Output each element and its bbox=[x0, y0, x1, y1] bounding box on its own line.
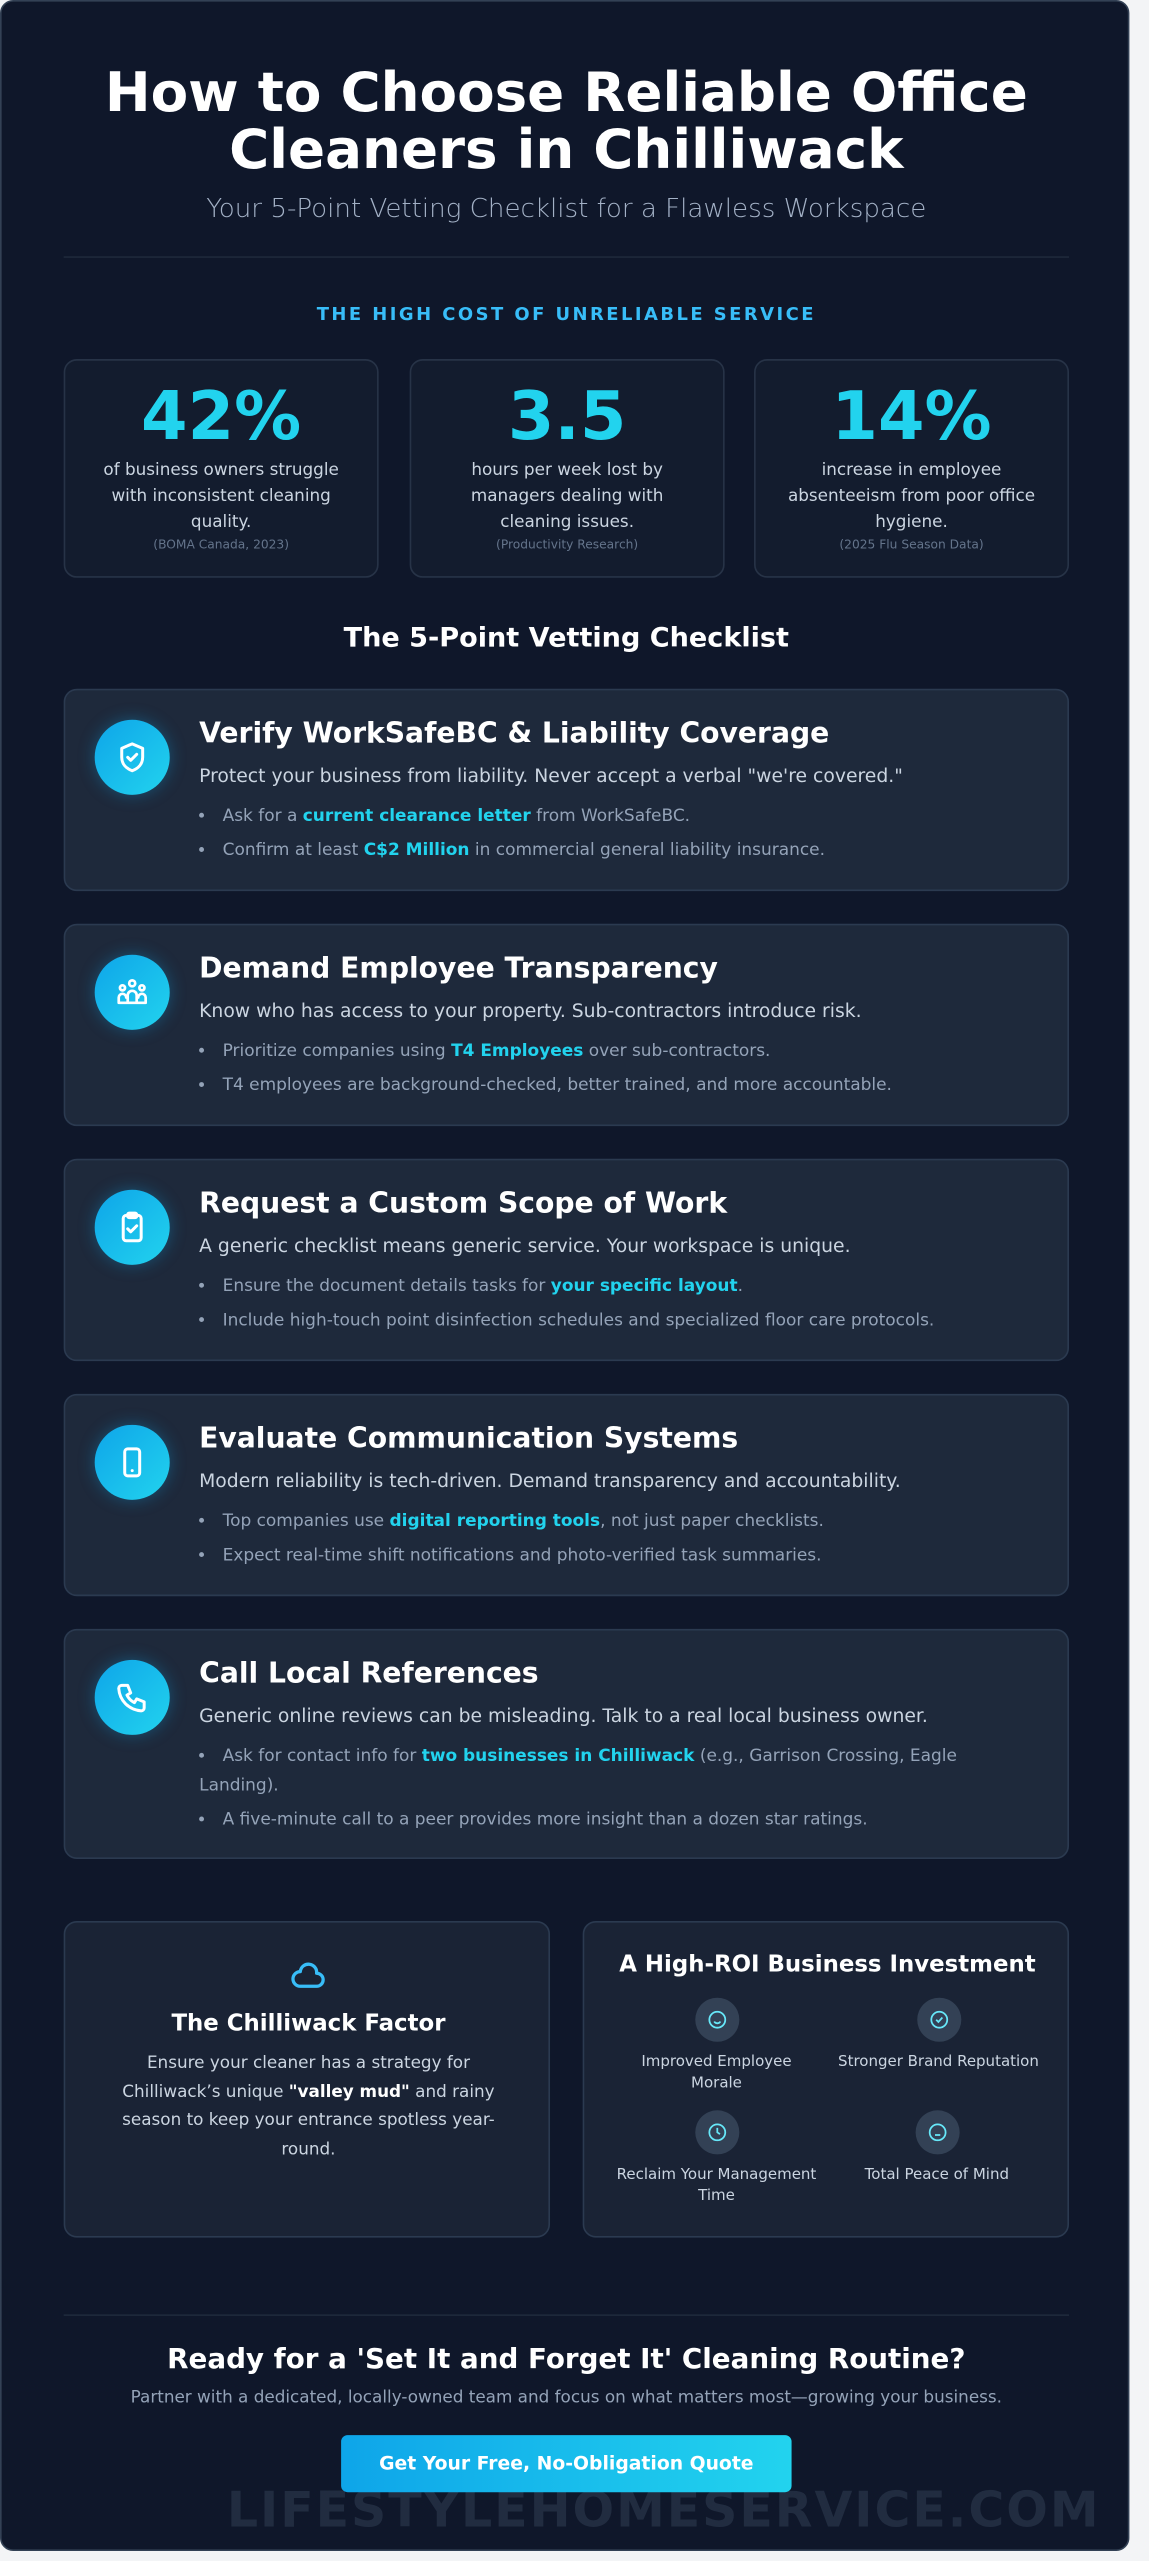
icon: phone bbox=[95, 1660, 170, 1735]
section heading: high cost: THE HIGH COST OF UNRELIABLE SERVICE bbox=[317, 304, 816, 325]
CTA button: Get Your Free, No-Obligation Quote bbox=[379, 2451, 754, 2474]
panel: chilliwack factor bbox=[64, 1921, 550, 2238]
CTA heading: Ready for a 'Set It and Forget It' Cleaning Routine? bbox=[167, 2344, 965, 2376]
panel: communication: Modern reliability is tech-driven. Demand transparency and accountability. bbox=[199, 1469, 901, 1492]
stat card: 3.5: 3.5 bbox=[508, 377, 626, 455]
panel: employee transparency: T4 employees are background-checked, better trained, and more accountable. bbox=[223, 1076, 892, 1095]
benefit: brand: Stronger Brand Reputation bbox=[838, 2053, 1039, 2071]
panel: custom scope: Ensure the document details tasks for your specific layout. bbox=[223, 1276, 743, 1296]
panel: custom scope: A generic checklist means generic service. Your workspace is unique. bbox=[199, 1234, 851, 1257]
panel: employee transparency: Prioritize companies using T4 Employees over sub-contractors. bbox=[223, 1041, 770, 1061]
panel: employee transparency bbox=[64, 924, 1069, 1126]
panel: verify coverage: Confirm at least C$2 Million in commercial general liability insurance. bbox=[223, 841, 825, 860]
stat card: 14%: (2025 Flu Season Data) bbox=[839, 537, 984, 552]
icon: phone device bbox=[95, 1425, 170, 1500]
benefit: peace bbox=[864, 2110, 1009, 2184]
panel: custom scope: Request a Custom Scope of Work bbox=[199, 1188, 727, 1221]
panel: references: Generic online reviews can be misleading. Talk to a real local business owner. bbox=[199, 1704, 928, 1727]
panel: custom scope: Include high-touch point disinfection schedules and specialized floor care protocols. bbox=[223, 1311, 934, 1330]
benefit: brand bbox=[838, 1998, 1039, 2071]
panel: ROI investment bbox=[583, 1921, 1069, 2238]
panel: employee transparency: Know who has access to your property. Sub-contractors introduce risk. bbox=[199, 999, 862, 1022]
benefit: morale bbox=[641, 1998, 792, 2092]
panel: verify coverage: Verify WorkSafeBC & Liability Coverage bbox=[199, 718, 829, 751]
panel: chilliwack factor: Ensure your cleaner has a strategy for Chilliwack’s unique "valley mud" and rainy season to keep your entrance spotless year-round. bbox=[122, 2053, 495, 2158]
stat card: 14%: increase in employee absenteeism from poor office hygiene. bbox=[788, 460, 1035, 532]
stat card: 42% bbox=[64, 359, 379, 578]
stat card: 14%: 14% bbox=[831, 377, 992, 455]
stat card: 42%: of business owners struggle with inconsistent cleaning quality. bbox=[103, 460, 339, 532]
stat card: 3.5 bbox=[410, 359, 725, 578]
watermark: LIFESTYLEHOMESERVICE.COM bbox=[227, 2482, 1101, 2540]
panel: verify coverage: Protect your business from liability. Never accept a verbal "we're covered." bbox=[199, 764, 903, 787]
stat card: 3.5: (Productivity Research) bbox=[496, 537, 638, 552]
stat card: 3.5: hours per week lost by managers dealing with cleaning issues. bbox=[471, 460, 663, 532]
panel: chilliwack factor: The Chilliwack Factor bbox=[171, 2011, 445, 2037]
panel: employee transparency: Demand Employee Transparency bbox=[199, 953, 718, 986]
panel: verify coverage: Ask for a current clearance letter from WorkSafeBC. bbox=[223, 806, 690, 826]
checklist heading: The 5-Point Vetting Checklist bbox=[344, 622, 789, 653]
stat card: 14% bbox=[754, 359, 1069, 578]
stat card: 42%: 42% bbox=[141, 377, 301, 455]
panel: references: Ask for contact info for two businesses in Chilliwack (e.g., Garrison Crossing, Eagle Landing). bbox=[199, 1746, 957, 1795]
panel: references: A five-minute call to a peer provides more insight than a dozen star ratings. bbox=[223, 1810, 868, 1830]
panel: custom scope bbox=[64, 1159, 1069, 1361]
benefit: time bbox=[617, 2110, 816, 2205]
panel: verify coverage bbox=[64, 689, 1069, 891]
panel: communication: Evaluate Communication Systems bbox=[199, 1423, 738, 1456]
stat card: 42%: (BOMA Canada, 2023) bbox=[153, 537, 289, 552]
CTA text: Partner with a dedicated, locally-owned team and focus on what matters most—growing your business. bbox=[131, 2388, 1002, 2407]
icon: clipboard bbox=[95, 1190, 170, 1265]
panel: references bbox=[64, 1629, 1069, 1859]
subtitle: Your 5-Point Vetting Checklist for a Flawless Workspace bbox=[206, 193, 926, 224]
icon: shield bbox=[95, 720, 170, 795]
icon: people bbox=[95, 955, 170, 1030]
benefit: time: Reclaim Your Management Time bbox=[617, 2166, 816, 2205]
benefit: morale: Improved Employee Morale bbox=[641, 2053, 792, 2092]
CTA button bbox=[341, 2435, 792, 2492]
panel: communication: Expect real-time shift notifications and photo-verified task summaries. bbox=[223, 1546, 822, 1565]
title bbox=[105, 60, 1028, 181]
title: How to Choose Reliable Office bbox=[105, 60, 1028, 124]
icon: cloud bbox=[291, 1962, 325, 1988]
panel: ROI investment: A High-ROI Business Investment bbox=[619, 1952, 1036, 1978]
benefit: peace: Total Peace of Mind bbox=[865, 2166, 1009, 2184]
panel: references: Call Local References bbox=[199, 1658, 539, 1691]
panel: communication bbox=[64, 1394, 1069, 1596]
panel: communication: Top companies use digital reporting tools, not just paper checklists. bbox=[223, 1511, 824, 1531]
title: Cleaners in Chilliwack bbox=[229, 118, 903, 181]
